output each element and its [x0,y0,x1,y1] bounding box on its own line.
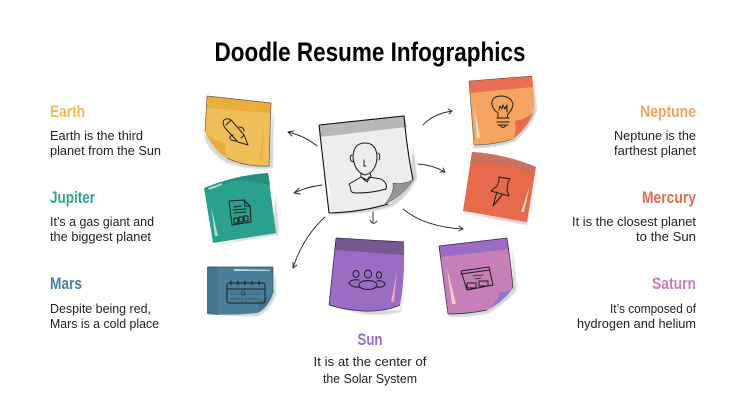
arrow: to pink note [403,209,463,231]
text block: Jupiter: Jupiter [50,188,95,207]
note: purple with team icon [329,238,406,315]
text block: Earth: Earth [50,102,85,121]
text block: Neptune: Neptune is the [614,129,696,143]
icon: team [349,270,385,290]
text block: Neptune [614,102,697,158]
icon: light bulb [492,96,513,128]
text block: Sun: It is at the center of [314,355,427,369]
text block: Jupiter: It’s a gas giant and [50,215,154,229]
arrow: to red note [418,164,445,172]
text block: Mercury: to the Sun [636,230,696,244]
icon: calendar [227,281,265,303]
note: red with push pin icon [462,152,539,225]
note: yellow with rocket icon [204,96,274,169]
note: blue with calendar icon [207,267,276,316]
text block: Sun: the Solar System [323,372,417,386]
text block: Mercury: Mercury [642,188,696,207]
text block: Jupiter [50,188,154,244]
title: Doodle Resume Infographics [214,37,526,67]
text block: Earth: Earth is the third [50,129,143,143]
icon: push pin [491,177,510,206]
arrow: down to purple note [370,212,377,223]
text block: Sun: Sun [358,330,382,349]
text block: Earth [50,102,161,158]
arrow: to orange note [423,109,452,125]
note: pink with browser window icon [439,238,517,317]
arrow: to yellow note [288,131,317,146]
text block: Mars: Despite being red, [50,302,151,316]
text block: Mars [50,274,159,331]
icon: document chart [229,200,251,225]
text block: Saturn: Saturn [652,274,696,293]
text block: Sun [314,330,427,386]
icon: person [349,143,386,193]
icon: rocket [223,119,248,145]
text block: Mercury: It is the closest planet [572,215,697,229]
text block: Saturn: hydrogen and helium [577,317,696,331]
note: orange with light bulb icon [469,76,537,148]
text block: Saturn [577,274,696,331]
text block: Mars: Mars is a cold place [50,317,159,331]
text block: Neptune: Neptune [640,102,696,121]
note: teal with document chart icon [204,173,279,245]
text block: Jupiter: the biggest planet [50,230,152,244]
note: centre grey with person icon [319,116,417,215]
text block: Mercury [572,188,697,244]
arrow: to teal note [294,185,322,194]
text block: Saturn: It’s composed of [610,302,696,316]
text block: Mars: Mars [50,274,82,293]
text block: Neptune: farthest planet [614,144,697,158]
arrow: to blue note [293,217,325,268]
icon: browser window [461,267,493,290]
text block: Earth: planet from the Sun [50,144,161,158]
